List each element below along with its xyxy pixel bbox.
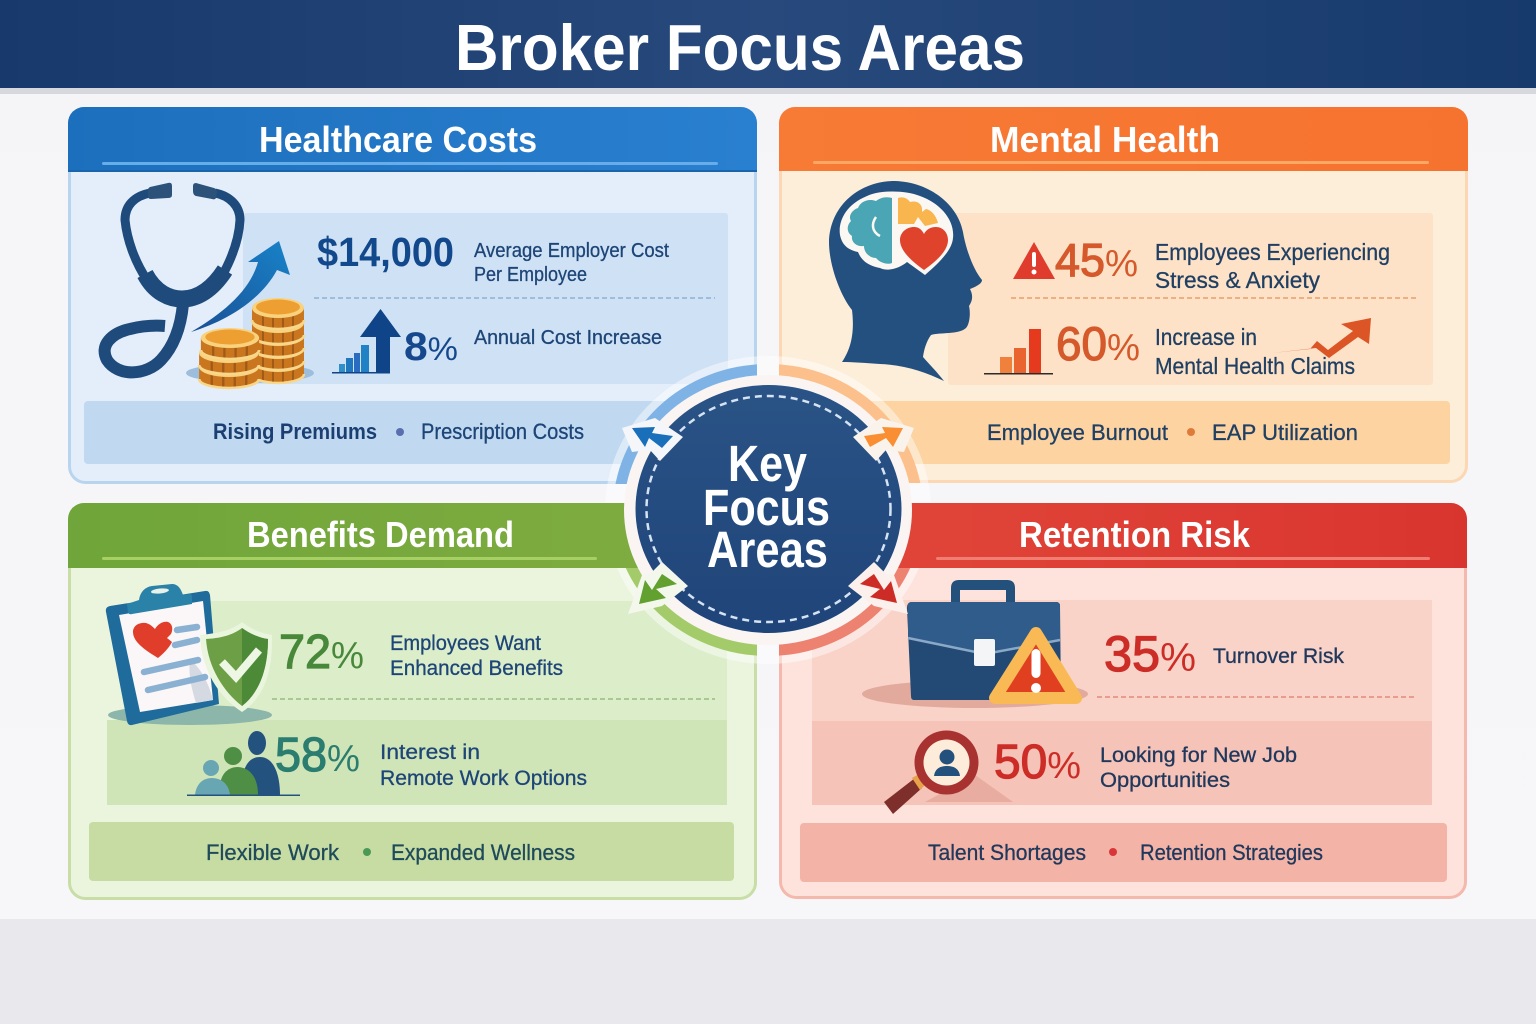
warning triangle xyxy=(995,633,1076,698)
stat label: Annual Cost Increase xyxy=(474,327,662,349)
bar text: Employee Burnout xyxy=(987,420,1168,445)
stats background upper xyxy=(812,600,1432,721)
stat: 60%: 60% xyxy=(1056,317,1140,370)
panel header xyxy=(68,107,757,172)
lower background band xyxy=(0,919,1536,1024)
panel: benefits demand xyxy=(70,504,756,898)
stat label line 2: Per Employee xyxy=(474,264,587,286)
icon: briefcase with warning xyxy=(862,580,1088,708)
bar text: EAP Utilization xyxy=(1212,420,1358,445)
navy disc xyxy=(636,385,902,633)
stat label: Employees Experiencing xyxy=(1155,239,1390,265)
stat label: Employees Want xyxy=(390,632,541,655)
stat: 8%: 8% xyxy=(404,325,458,369)
panel title: Retention Risk xyxy=(1019,514,1251,555)
title banner xyxy=(0,0,1536,94)
brain outline xyxy=(840,192,953,275)
stat label: Average Employer Cost xyxy=(474,240,669,262)
green ring segment xyxy=(626,568,757,656)
stats background lower xyxy=(812,721,1432,805)
stat label: Looking for New Job xyxy=(1100,744,1297,767)
center ring backdrop xyxy=(605,356,931,664)
hub text: Focus xyxy=(703,479,830,536)
bottom bar xyxy=(860,401,1450,464)
icon: people group xyxy=(187,731,300,796)
hub text xyxy=(703,435,830,578)
panel header xyxy=(779,107,1468,171)
icon: up arrow with bars xyxy=(332,309,401,374)
stat label line 2: Stress & Anxiety xyxy=(1155,267,1320,293)
bar text: Retention Strategies xyxy=(1140,840,1323,865)
bar text: Expanded Wellness xyxy=(391,840,575,865)
retention risk header xyxy=(898,503,1467,568)
arrow: to retention risk xyxy=(848,562,908,614)
icon: bar chart xyxy=(984,329,1053,374)
icon: warning triangle xyxy=(1013,242,1055,279)
bottom bar xyxy=(84,401,684,464)
stat label: Increase in xyxy=(1155,324,1257,350)
bar text: Flexible Work xyxy=(206,840,340,865)
blue ring segment xyxy=(616,364,757,484)
stat: $14,000: $14,000 xyxy=(317,229,454,275)
brain left lobe xyxy=(848,197,892,264)
hub text: Areas xyxy=(707,521,828,578)
bottom bar xyxy=(89,822,734,881)
icon: stethoscope xyxy=(105,183,240,372)
bullet xyxy=(396,428,404,436)
stat label line 2: Mental Health Claims xyxy=(1155,353,1355,379)
arrow: to mental health xyxy=(853,418,914,461)
panel title: Mental Health xyxy=(990,119,1220,160)
title: Broker Focus Areas xyxy=(455,11,1025,84)
icon: clipboard with shield xyxy=(106,584,272,725)
orange ring segment xyxy=(779,364,920,483)
bar text: Talent Shortages xyxy=(928,840,1086,865)
panel title: Healthcare Costs xyxy=(259,119,537,160)
panel title: Benefits Demand xyxy=(247,514,514,555)
benefits demand header xyxy=(68,503,638,568)
panel: mental health xyxy=(779,107,1468,482)
brain right lobes xyxy=(898,197,938,226)
dashed ring xyxy=(646,396,890,622)
bullet xyxy=(1187,428,1195,436)
stat: 45%: 45% xyxy=(1055,234,1138,286)
hub text: Key xyxy=(728,435,808,492)
icon: rising arrow xyxy=(191,241,290,332)
stats background upper xyxy=(200,601,727,720)
outer glow xyxy=(605,356,931,664)
stat label line 2: Enhanced Benefits xyxy=(390,657,563,680)
stat: 58%: 58% xyxy=(275,729,360,782)
red ring segment xyxy=(779,568,910,656)
stats background xyxy=(243,213,728,384)
stat: 35%: 35% xyxy=(1104,626,1196,682)
icon: magnifier with person xyxy=(884,730,1013,814)
shield xyxy=(200,622,272,712)
stat label: Interest in xyxy=(380,741,480,764)
center hub xyxy=(622,375,914,645)
arrow: to benefits demand xyxy=(628,562,688,614)
white halo xyxy=(624,375,912,645)
stat: 72%: 72% xyxy=(279,626,364,679)
icon: head with brain and heart xyxy=(829,181,982,381)
arrow: to healthcare xyxy=(622,418,683,461)
bullet xyxy=(1109,848,1117,856)
icon: trend arrow xyxy=(1272,318,1371,358)
icon: coin stacks xyxy=(186,298,314,388)
stat: 50%: 50% xyxy=(994,736,1081,789)
stats background lower xyxy=(107,720,727,805)
stat label line 2: Remote Work Options xyxy=(380,767,587,790)
panel: healthcare costs xyxy=(68,107,757,482)
bullet xyxy=(363,848,371,856)
stats background xyxy=(948,213,1433,385)
heart xyxy=(900,227,948,270)
stat label: Turnover Risk xyxy=(1213,645,1344,668)
bar text: Rising Premiums xyxy=(213,419,377,444)
panel: retention risk xyxy=(780,504,1466,898)
stat label line 2: Opportunities xyxy=(1100,769,1230,792)
bar text: Prescription Costs xyxy=(421,419,584,444)
bottom bar xyxy=(800,823,1447,882)
